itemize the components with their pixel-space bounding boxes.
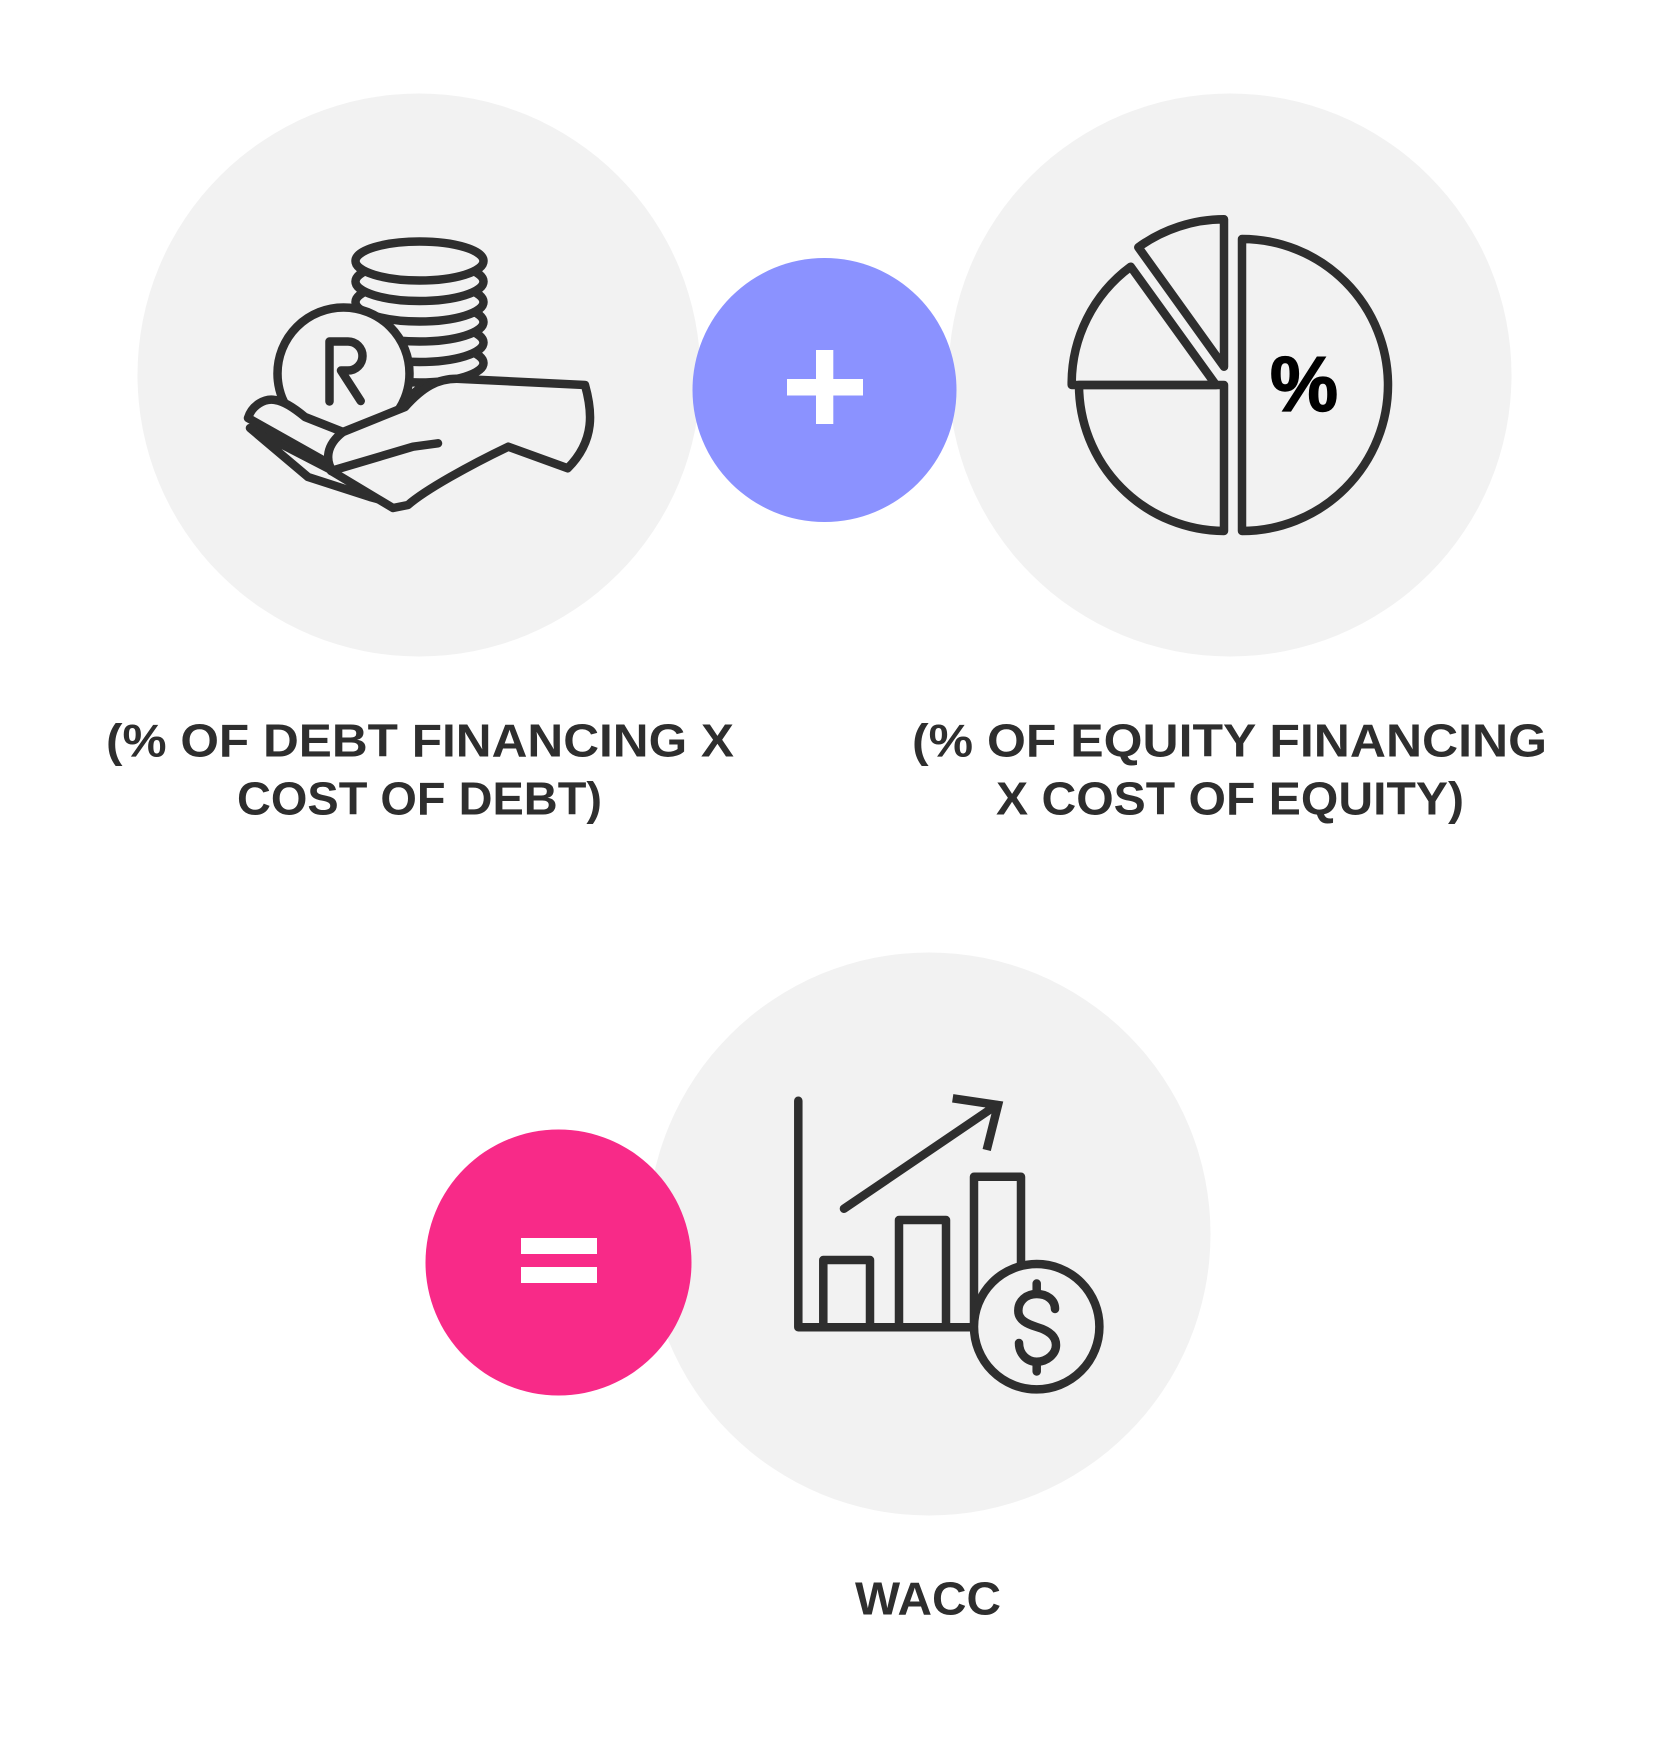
background circle: debt [138,94,700,656]
label: WACC: WACC [855,1572,1001,1624]
panel: WACC result [648,952,1210,1516]
panel: equity financing [948,94,1512,656]
panel: debt financing [138,94,700,656]
icon: coins in hand [248,242,590,508]
background circle: WACC [648,952,1210,1516]
icon: pie chart with percent [1072,219,1388,531]
icon: growth chart with dollar coin [798,1098,1099,1389]
label: equity formula: (% OF EQUITY FINANCING [912,714,1547,766]
plus operator [692,258,956,522]
label: debt formula: (% OF DEBT FINANCING X [106,714,734,766]
background circle: equity [948,94,1512,656]
label: debt formula: COST OF DEBT) [237,772,602,824]
label: equity formula: X COST OF EQUITY) [996,772,1464,824]
equals operator [426,1130,692,1396]
icon: pie chart with percent: % [1270,340,1338,428]
